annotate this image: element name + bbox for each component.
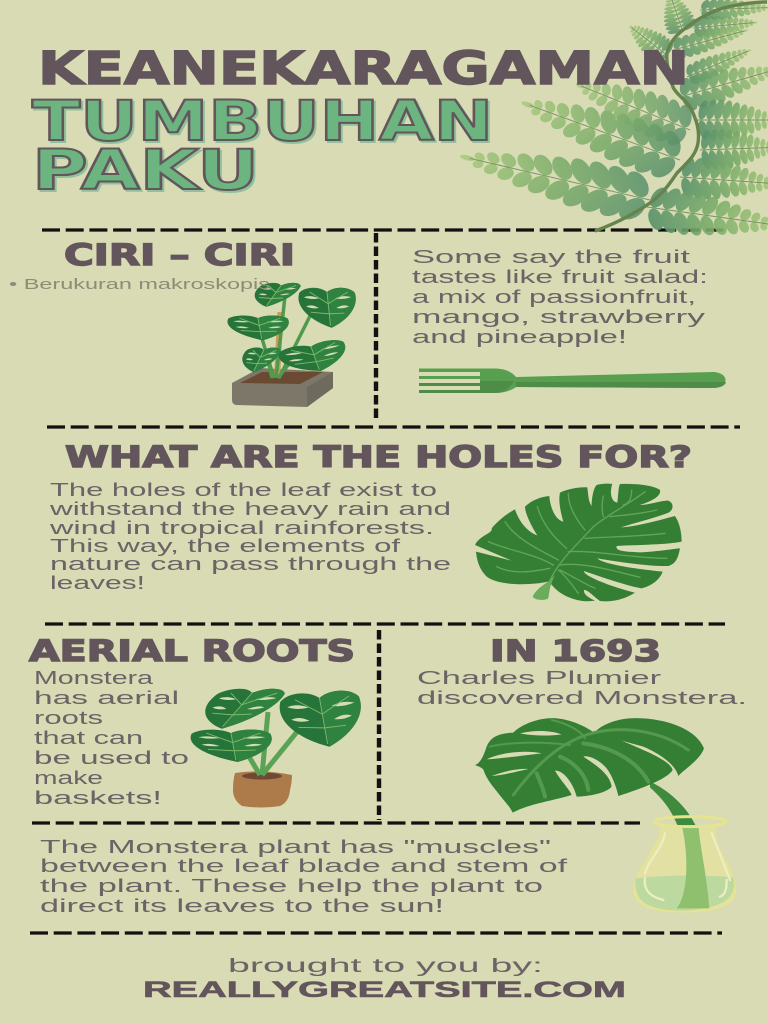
title: KEANEKARAGAMAN bbox=[38, 42, 689, 95]
text: fruit taste: and pineapple! bbox=[412, 327, 627, 347]
text: holes: The holes of the leaf exist to bbox=[50, 480, 437, 500]
bullet text: • Berukuran makroskopis bbox=[9, 276, 270, 293]
illustration: monstera leaf in glass vase bbox=[475, 718, 735, 912]
panel: holes bbox=[48, 440, 692, 601]
text: fruit taste: a mix of passionfruit, bbox=[412, 287, 696, 307]
text: holes: withstand the heavy rain and bbox=[48, 499, 451, 519]
text: in 1693: discovered Monstera. bbox=[417, 688, 747, 708]
text: in 1693: Charles Plumier bbox=[417, 668, 661, 688]
text: fruit taste: Some say the fruit bbox=[412, 247, 690, 267]
panel: muscles bbox=[40, 837, 569, 916]
panel: muscles: between the leaf blade and stem of bbox=[40, 856, 569, 876]
text: aerial roots: make bbox=[34, 768, 103, 788]
heading: ciri-ciri: CIRI – CIRI bbox=[64, 238, 295, 272]
panel: ciri-ciri bbox=[9, 238, 356, 407]
footer: REALLYGREATSITE.COM bbox=[143, 977, 626, 1002]
panel: aerial roots bbox=[29, 634, 364, 808]
icon: potted monstera in square planter bbox=[227, 283, 356, 407]
text: in 1693 bbox=[417, 668, 747, 708]
panel: muscles: The Monstera plant has "muscles" bbox=[40, 837, 551, 857]
text: holes: nature can pass through the bbox=[50, 554, 451, 574]
text: aerial roots: be used to bbox=[34, 748, 189, 768]
title: TUMBUHAN bbox=[32, 89, 493, 153]
footer: brought to you by: bbox=[228, 956, 543, 977]
text: holes: This way, the elements of bbox=[50, 536, 402, 556]
text: holes bbox=[48, 480, 451, 593]
panel: muscles: direct its leaves to the sun! bbox=[40, 896, 444, 916]
icon: monstera leaf bbox=[475, 484, 682, 601]
text: fruit taste: mango, strawberry bbox=[412, 307, 705, 327]
text: aerial roots: roots bbox=[34, 708, 103, 728]
icon: monstera in basket bbox=[182, 689, 364, 808]
footer bbox=[143, 956, 626, 1002]
text: aerial roots: that can bbox=[34, 728, 143, 748]
heading: aerial roots: AERIAL ROOTS bbox=[29, 634, 355, 668]
panel: muscles: the plant. These help the plant to bbox=[40, 876, 543, 896]
title: PAKU bbox=[32, 138, 259, 202]
icon: fork bbox=[419, 368, 726, 393]
panel: in 1693 bbox=[417, 634, 747, 708]
heading: holes: WHAT ARE THE HOLES FOR? bbox=[65, 440, 692, 474]
panel: fruit taste bbox=[412, 247, 726, 393]
text: holes: leaves! bbox=[50, 573, 145, 593]
text: aerial roots bbox=[34, 668, 189, 808]
text: aerial roots: has aerial bbox=[34, 688, 179, 708]
text: aerial roots: Monstera bbox=[34, 668, 155, 688]
heading: in 1693: IN 1693 bbox=[490, 634, 661, 668]
illustration: fern frond bbox=[454, 0, 768, 250]
text: fruit taste bbox=[412, 247, 708, 347]
title bbox=[32, 42, 689, 202]
text: aerial roots: baskets! bbox=[34, 788, 162, 808]
text: fruit taste: tastes like fruit salad: bbox=[412, 267, 708, 287]
text: holes: wind in tropical rainforests. bbox=[48, 518, 434, 538]
